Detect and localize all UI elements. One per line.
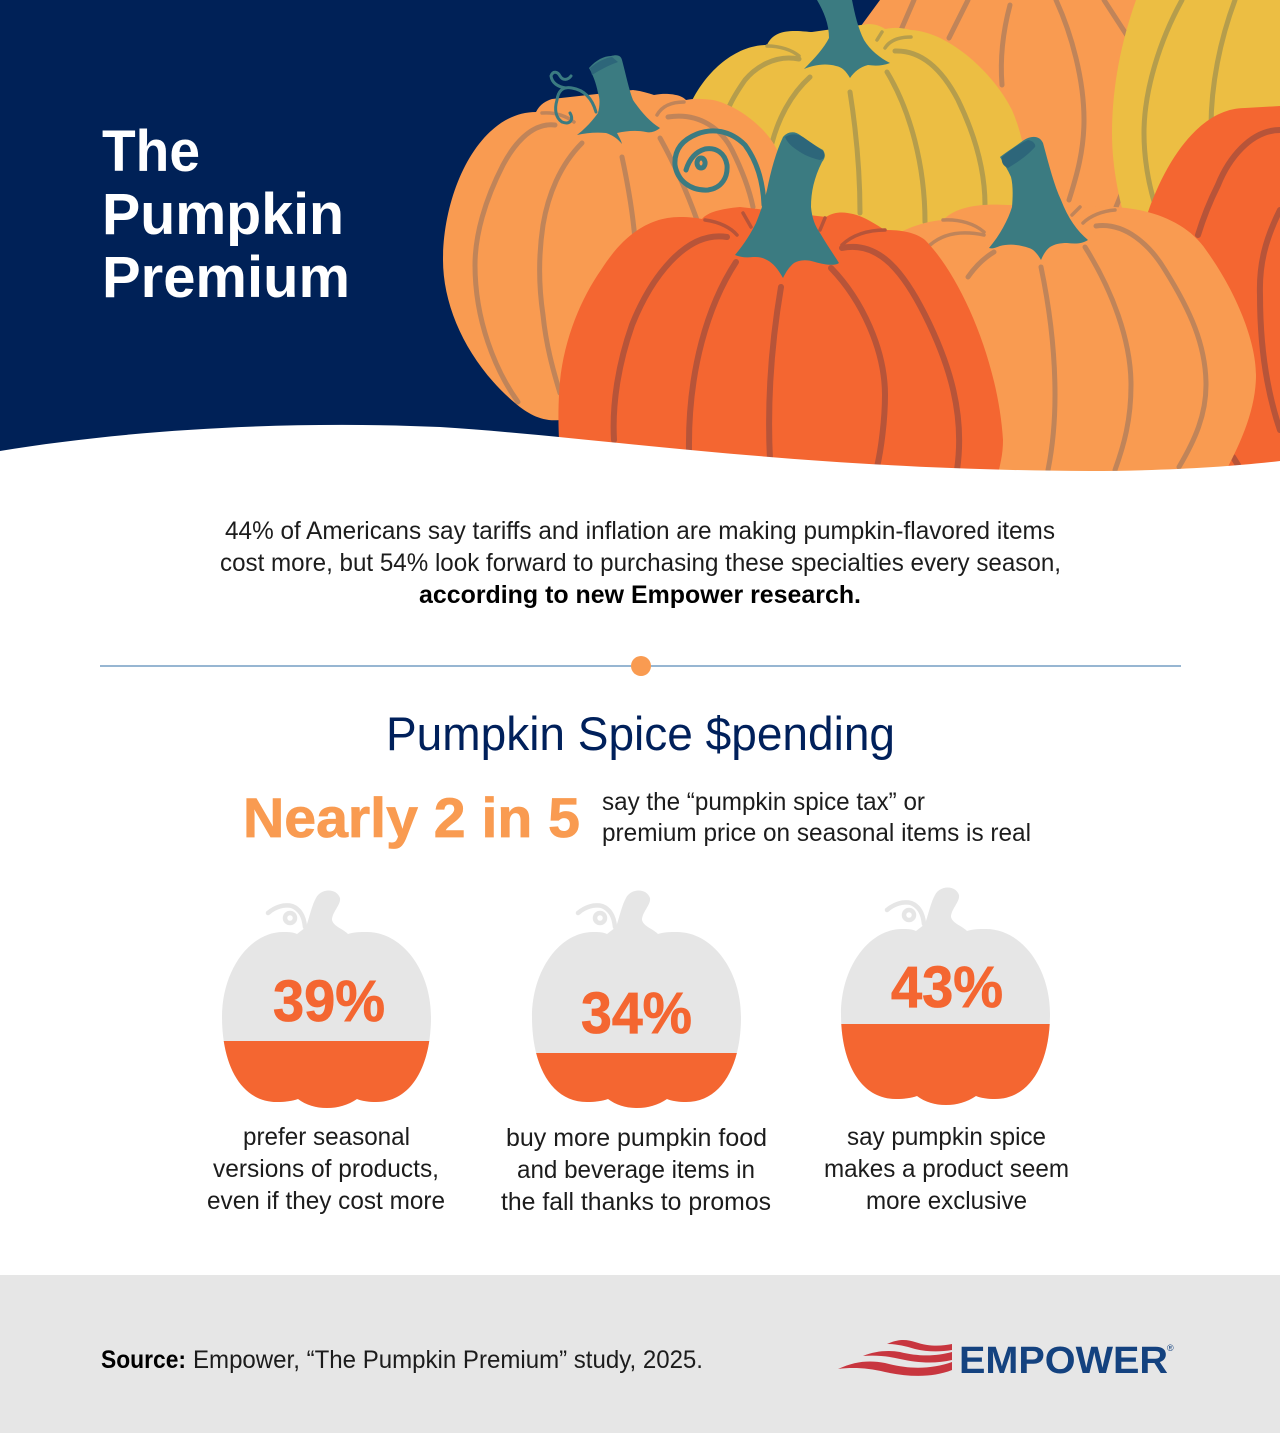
stem top [590,57,618,75]
stat: 34% [501,890,771,1216]
white wave and page background [0,425,1280,1433]
stat: 34%: 34% [581,981,692,1046]
footer band [0,1275,1280,1433]
stem top [785,134,824,160]
title: The [102,119,200,184]
stat: 39%: prefer seasonal [243,1123,410,1151]
illustration: pumpkins [443,0,1280,480]
title: Pumpkin [102,182,344,247]
tendril: large [675,131,764,205]
intro text: cost more, but 54% look forward to purchasing these specialties every season, [220,549,1061,577]
stat callout: Nearly 2 in 5 [243,786,580,849]
stat: 34%: the fall thanks to promos [501,1188,771,1216]
divider with dot [100,656,1181,676]
header background [0,0,1280,480]
stat callout: say the “pumpkin spice tax” or [602,788,925,816]
stat: 43%: makes a product seem [824,1155,1069,1183]
stat callout [243,786,1031,849]
pumpkin: center yellow [690,0,1034,300]
stat: 39% [207,890,445,1215]
icon: pumpkin 39 [222,890,431,1108]
tendril: small [551,72,596,123]
pumpkin: front orange [895,137,1256,478]
title [102,119,350,310]
stem: left pumpkin [577,55,660,144]
logo: Empower: EMPOWER [959,1340,1168,1382]
icon: pumpkin 43 [841,887,1050,1105]
pumpkin: left orange [443,55,790,430]
stem: front orange [989,137,1088,260]
pumpkin: right yellow [1112,0,1280,240]
icon: pumpkin 34 [532,890,741,1108]
stem: yellow pumpkin [804,0,890,78]
source note: Empower, “The Pumpkin Premium” study, 2025. [193,1346,703,1374]
intro text [220,517,1061,609]
stem top [1002,140,1035,168]
stat: 39%: 39% [273,969,385,1034]
section heading: Pumpkin Spice $pending [386,707,895,760]
stat: 43%: 43% [891,955,1003,1020]
stat: 34%: buy more pumpkin food [506,1124,767,1152]
stem: front red [735,132,839,278]
logo: Empower: ® [1167,1343,1174,1353]
stat: 39%: even if they cost more [207,1187,445,1215]
stat: 34%: and beverage items in [517,1156,755,1184]
intro text: according to new Empower research. [419,581,861,609]
pumpkin: front red [558,132,1003,478]
source note: Source: [101,1346,186,1374]
intro text: 44% of Americans say tariffs and inflation are making pumpkin-flavored items [225,517,1055,545]
logo flag [838,1340,952,1376]
stat: 39%: versions of products, [213,1155,439,1183]
stat: 43% [824,887,1069,1215]
pumpkin: back orange [858,0,1160,260]
pumpkin: right red [1148,106,1280,480]
stat: 43%: more exclusive [866,1187,1027,1215]
logo: Empower [838,1340,1174,1382]
title: Premium [102,245,350,310]
stat: 43%: say pumpkin spice [847,1123,1046,1151]
stat callout: premium price on seasonal items is real [602,819,1031,847]
